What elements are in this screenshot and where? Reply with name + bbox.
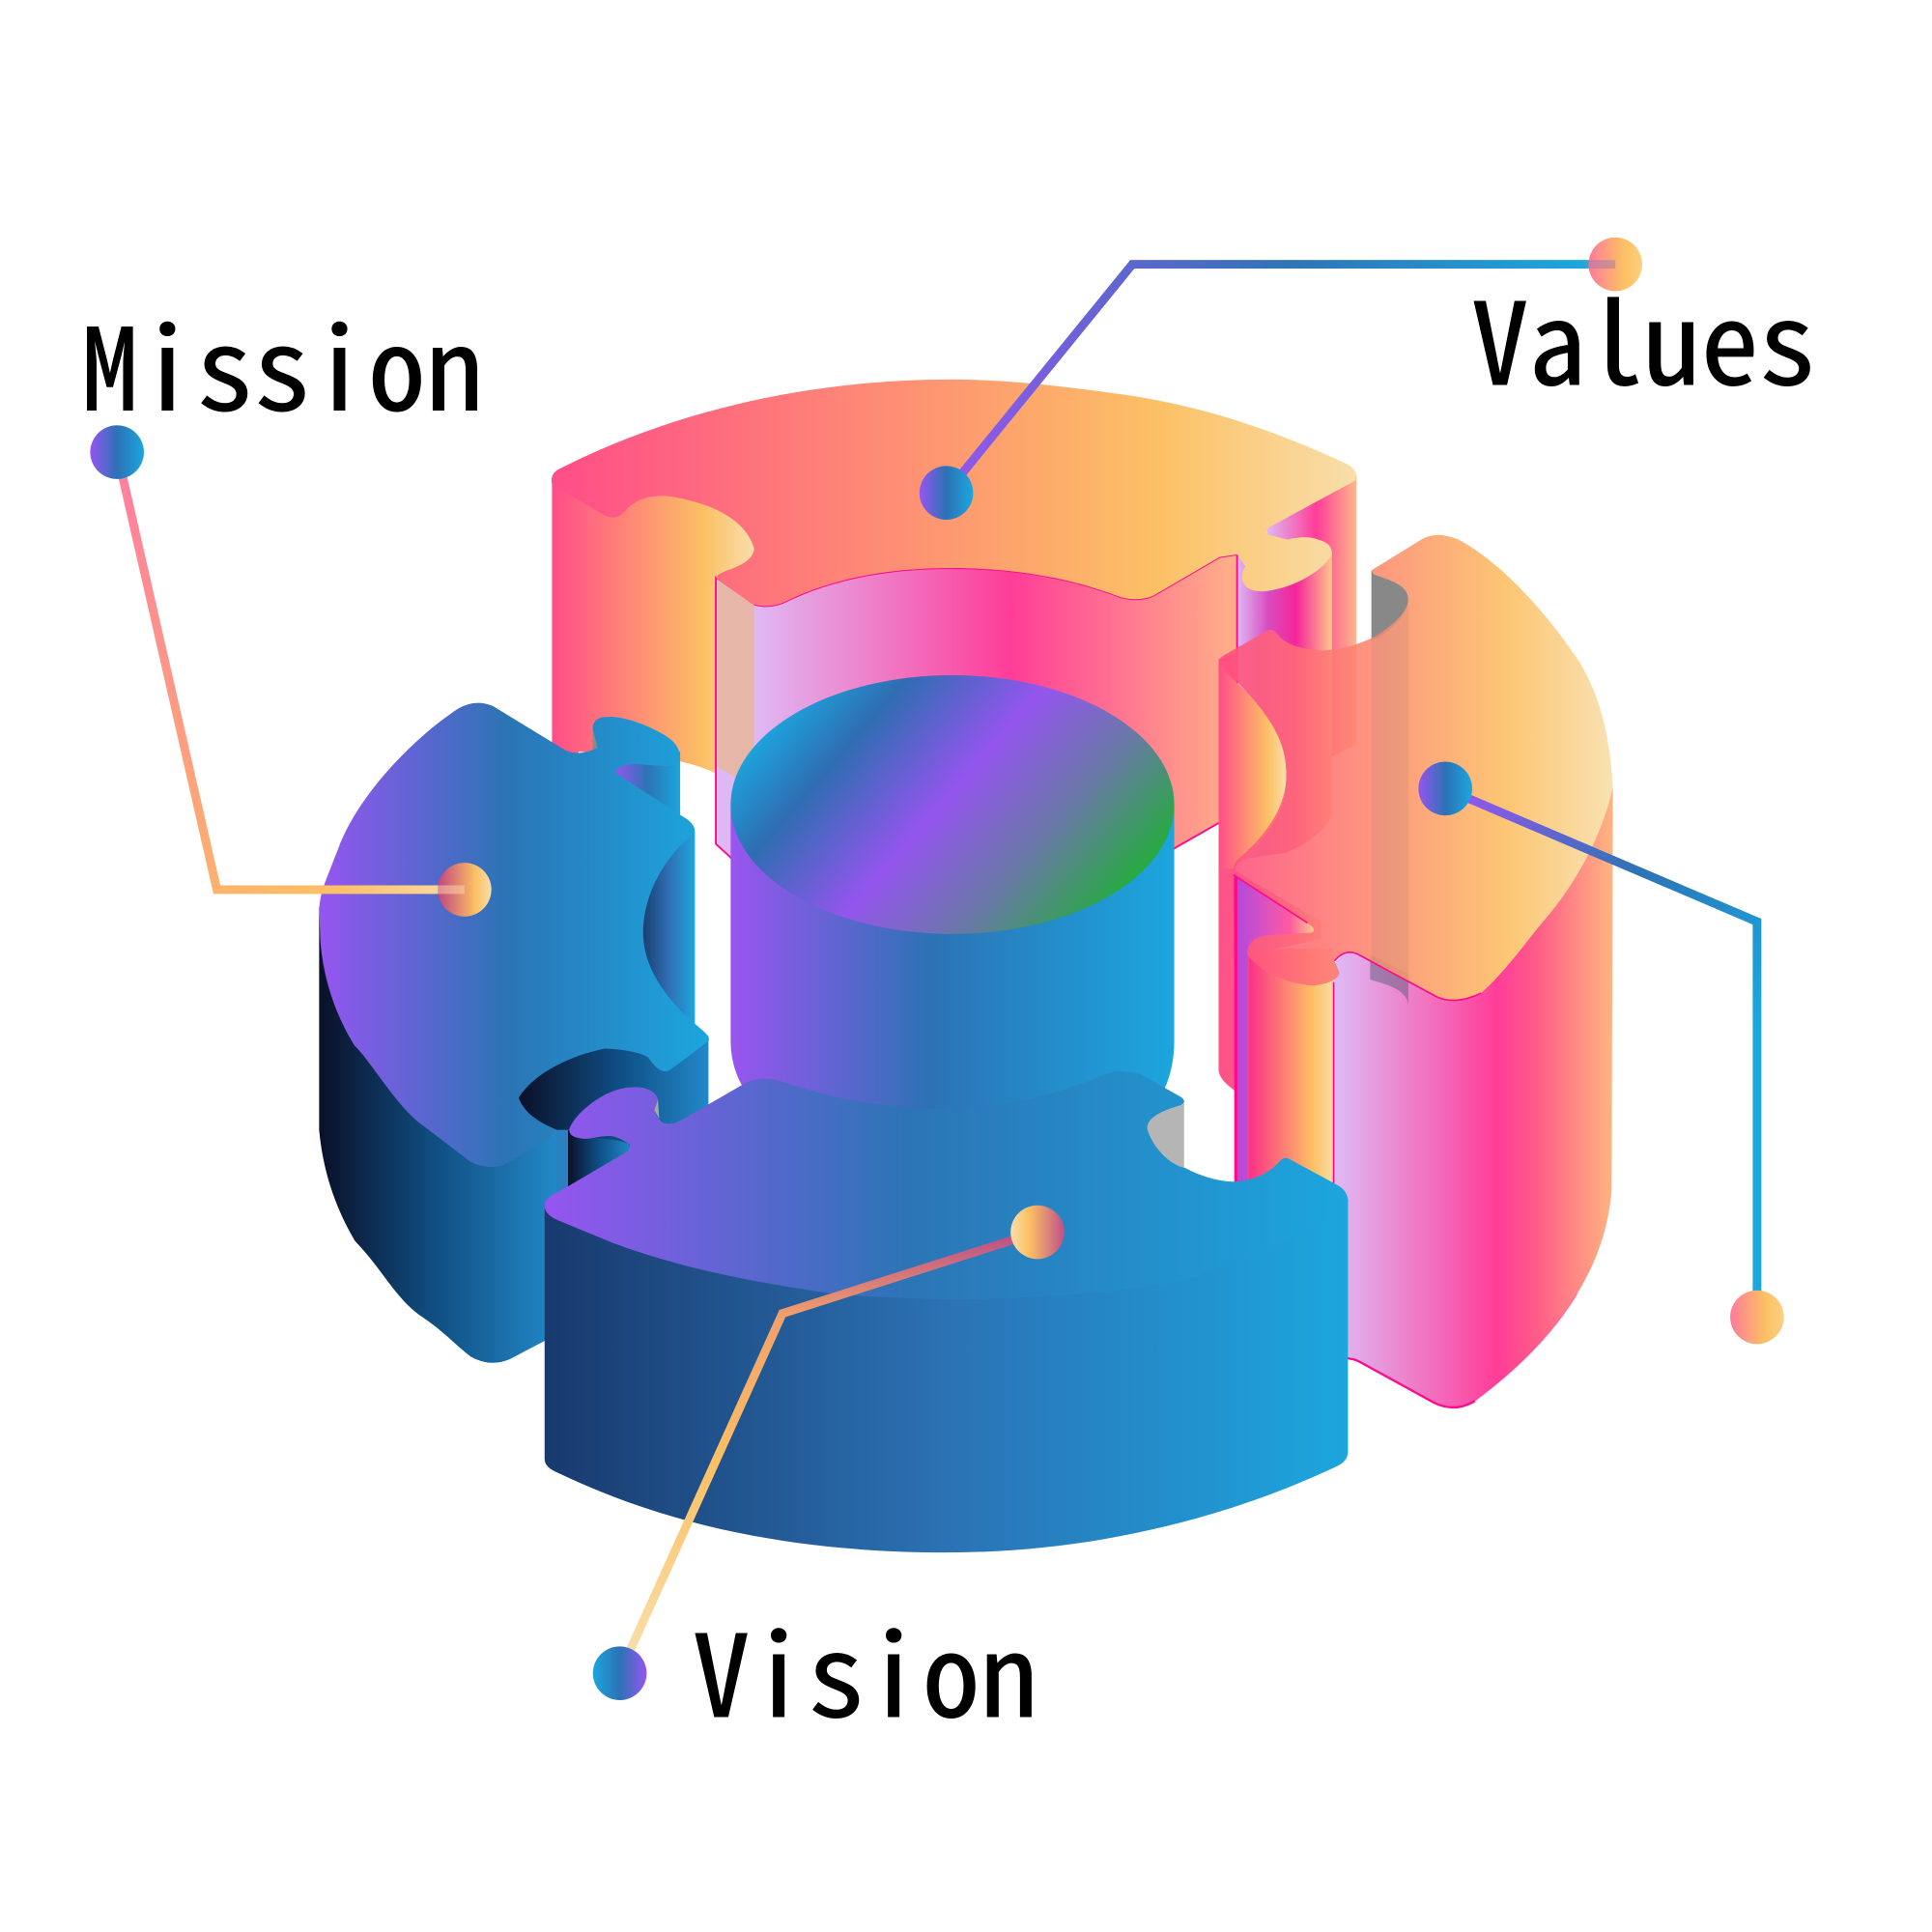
right piece top surface <box>1219 535 1613 1001</box>
left piece concave wall <box>604 832 695 1029</box>
front piece side wall <box>545 1199 1348 1552</box>
right piece front wall <box>1334 786 1613 1407</box>
left piece grey sliver <box>593 727 600 752</box>
central cylinder <box>730 675 1175 1115</box>
cylinder top ellipse <box>730 675 1175 934</box>
right piece outer wall faint edge <box>1475 1293 1577 1401</box>
marker: values piece dot <box>920 466 973 520</box>
right piece translucent grey band <box>1372 599 1408 980</box>
back piece left outer wall <box>552 478 754 795</box>
label: Values: Values <box>1471 253 1816 417</box>
back piece inner front wall <box>716 554 1237 936</box>
right piece lower grey shadow <box>1370 955 1408 1007</box>
right piece far left wall <box>1218 653 1237 1091</box>
leader line: vision <box>620 1233 1037 1673</box>
left piece gap wall <box>557 1130 569 1202</box>
back puzzle piece <box>552 380 1356 936</box>
front piece top surface <box>545 1071 1348 1299</box>
left piece top surface <box>319 703 709 1167</box>
marker: mission label dot <box>90 425 144 479</box>
right piece surface pink edge <box>1234 875 1481 1001</box>
left piece outer wall <box>319 899 557 1363</box>
marker: values line overlay <box>1588 260 1615 269</box>
back piece top surface <box>552 380 1356 606</box>
label: Mission: Mission <box>81 279 483 443</box>
marker: values label dot <box>1588 238 1642 291</box>
left puzzle piece <box>319 703 709 1363</box>
back piece knob wall <box>1237 549 1332 860</box>
back piece tan overlap strip <box>717 579 754 793</box>
right piece grey notch wall <box>1372 571 1408 640</box>
front piece tab wall <box>559 1130 631 1202</box>
left piece tab notch wall <box>610 752 680 818</box>
marker: vision label dot <box>593 1646 646 1700</box>
leader line: values <box>947 265 1615 493</box>
label: Vision: Vision <box>693 1585 1037 1749</box>
marker: left piece dot <box>438 863 492 917</box>
leader line: mission <box>117 452 465 890</box>
marker: right piece dot <box>1418 762 1472 815</box>
right puzzle piece <box>1218 535 1613 1407</box>
marker: left piece line overlay <box>438 885 465 894</box>
cylinder body <box>730 805 1175 1115</box>
leader line: right piece <box>1445 788 1757 1318</box>
back piece right wall <box>1266 474 1356 788</box>
front piece grey notch wall <box>1144 1100 1184 1173</box>
front puzzle piece <box>545 1071 1348 1552</box>
front piece grey sliver <box>654 1099 659 1119</box>
right piece front wall pink outline <box>1337 1358 1475 1407</box>
marker: right lower dot <box>1730 1291 1784 1344</box>
marker: front piece dot <box>1010 1206 1065 1259</box>
right piece notch wall <box>1234 870 1334 1189</box>
right piece concave wall <box>1220 668 1287 868</box>
left piece notch wall <box>505 985 708 1202</box>
